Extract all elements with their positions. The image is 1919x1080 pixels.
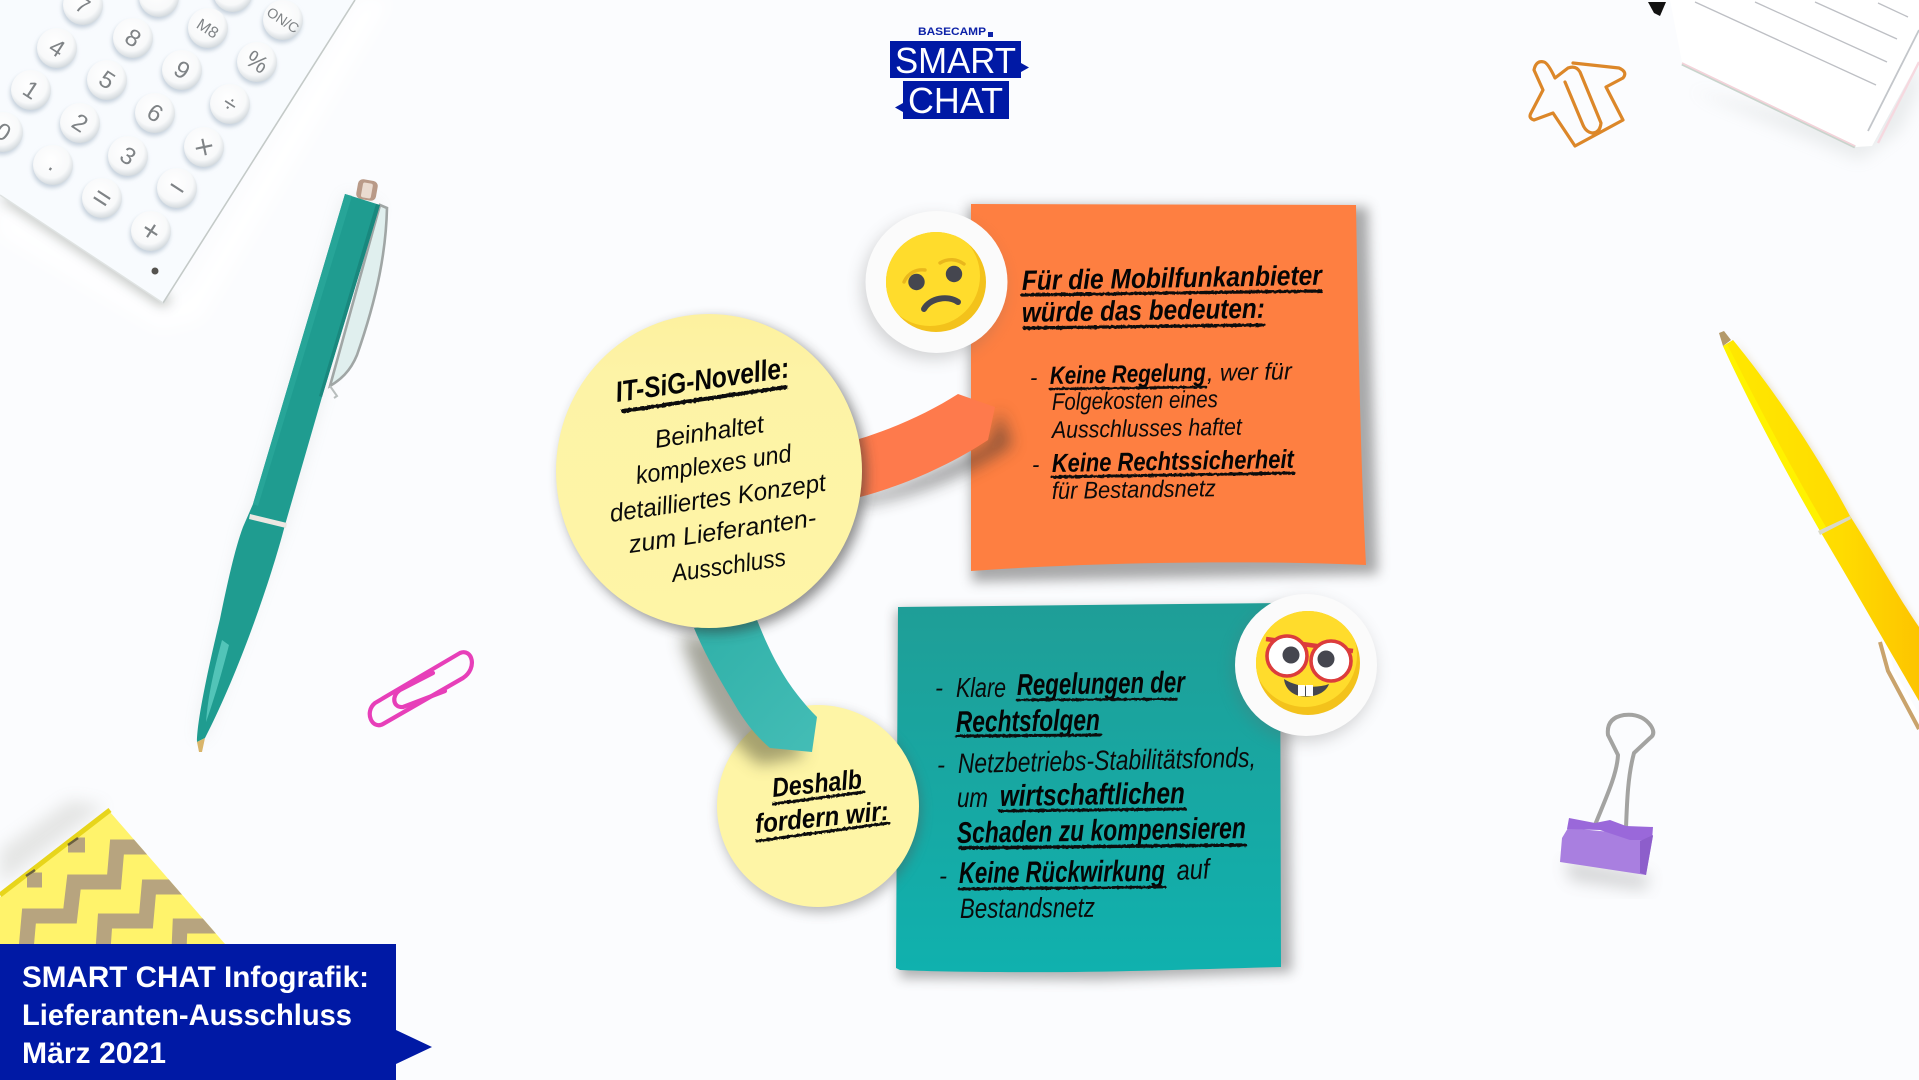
calculator: 1	[18, 75, 44, 105]
banner: footer title: März 2021	[22, 1037, 166, 1070]
orange house paper clip	[1530, 62, 1625, 146]
banner: footer title	[0, 944, 432, 1080]
glasses	[1266, 636, 1353, 681]
pen clip	[330, 205, 387, 398]
yellow pen clip	[1884, 642, 1919, 722]
yellow pen ring	[1818, 516, 1851, 535]
list item: Keine Rechtssicherheit	[1032, 444, 1295, 505]
list item: Regelungen: Regelungen der	[1017, 666, 1187, 702]
calculator: %	[240, 45, 273, 80]
panel: orange note	[968, 204, 1378, 582]
circle body text	[608, 410, 829, 588]
circle body text: zum Lieferanten-	[626, 504, 818, 559]
calculator: ÷	[217, 90, 243, 119]
list item: Keine Regelung: Folgekosten eines	[1052, 386, 1218, 416]
pen push button	[355, 178, 379, 202]
calculator: 6	[142, 98, 168, 128]
list item: Stabilitätsfonds: wirtschaftlichen	[1000, 777, 1185, 813]
small circle heading	[754, 764, 890, 841]
emoji: nerd face	[1233, 594, 1377, 742]
list item: Stabilitätsfonds: -	[937, 752, 945, 779]
calculator: 3	[115, 141, 141, 171]
small circle heading: Deshalb	[771, 764, 863, 803]
purple binder clip	[1560, 715, 1653, 890]
list item: Stabilitätsfonds	[937, 742, 1256, 850]
circle body text: komplexes und	[634, 439, 794, 490]
banner: footer title: Lieferanten-Ausschluss	[22, 999, 352, 1032]
logo: Basecamp Smart Chat	[890, 26, 1029, 121]
pen tip	[197, 738, 205, 752]
panel: teal note	[896, 603, 1292, 980]
calculator: M8	[193, 16, 221, 42]
calculator: +	[134, 213, 167, 250]
yellow pen	[1719, 331, 1919, 729]
panel: small yellow sticky circle	[717, 705, 921, 912]
small circle heading: fordern wir:	[754, 796, 890, 839]
calculator: .	[44, 151, 64, 177]
pen ring	[249, 514, 287, 528]
circle body text: detailliertes Konzept	[608, 469, 829, 528]
heading	[1022, 260, 1324, 328]
notepad	[1670, 0, 1919, 160]
list item: Rückwirkung: -	[939, 863, 947, 890]
list item: Keine Rechtssicherheit: für Bestandsnetz	[1052, 475, 1216, 505]
pink paper clip	[370, 652, 472, 725]
logo box Smart: SMART	[895, 40, 1016, 81]
heading: würde das bedeuten:	[1022, 293, 1265, 328]
calculator	[0, 0, 390, 330]
calculator: 9	[169, 55, 195, 85]
list item: Rückwirkung: Bestandsnetz	[960, 892, 1095, 924]
yellow pen tip	[1719, 331, 1731, 346]
panel: big yellow sticky circle	[556, 314, 867, 633]
list item: Keine Regelung	[1030, 358, 1293, 444]
list item: Keine Regelung: -	[1030, 365, 1037, 390]
calculator: ON/C	[264, 4, 302, 36]
calculator keys	[0, 0, 303, 251]
circle body text: Ausschluss	[668, 544, 788, 588]
list item: Regelungen	[935, 666, 1187, 739]
connector: teal arrow	[680, 620, 817, 765]
calculator: 4	[44, 33, 70, 63]
list item: Rückwirkung: auf	[1176, 853, 1213, 886]
calculator: 2	[67, 108, 93, 138]
black pen tip	[1648, 2, 1666, 16]
heading: Für die Mobilfunkanbieter	[1022, 260, 1324, 296]
yellow notebook	[0, 800, 225, 950]
list item: Rückwirkung: Keine Rückwirkung	[959, 855, 1165, 890]
circle heading: IT-SiG-Novelle:	[613, 352, 791, 409]
list item: Stabilitätsfonds: um	[957, 782, 988, 813]
calculator: ×	[187, 129, 220, 166]
emoji: worried face	[862, 211, 1008, 359]
calculator: =	[85, 180, 118, 217]
list item: Keine Regelung: Ausschlusses haftet	[1050, 414, 1243, 444]
calculator: 8	[120, 23, 146, 53]
mouth	[1284, 679, 1329, 697]
list item: Stabilitätsfonds: Schaden zu kompensieren	[957, 812, 1246, 850]
list item: Keine Regelung: , wer für	[1207, 358, 1293, 387]
list item: Regelungen: Rechtsfolgen	[956, 704, 1100, 739]
list item: Regelungen: Klare	[956, 672, 1006, 703]
logo box Chat: CHAT	[908, 80, 1003, 121]
teal pen	[197, 178, 387, 752]
connector: orange arrow	[859, 394, 1012, 505]
list item: Keine Regelung: Keine Regelung	[1050, 359, 1206, 390]
list item: Rückwirkung	[939, 853, 1213, 924]
list item: Stabilitätsfonds: Netzbetriebs-Stabilitätsfonds,	[957, 742, 1256, 779]
calculator: −	[160, 170, 193, 207]
logo wordmark Basecamp: BASECAMP	[918, 26, 986, 38]
calculator: 5	[94, 65, 120, 95]
list item: Keine Rechtssicherheit: Keine Rechtssicherheit	[1052, 444, 1295, 478]
list item: Regelungen: -	[935, 675, 943, 702]
circle body text: Beinhaltet	[653, 410, 767, 454]
banner: footer title: SMART CHAT Infografik:	[22, 961, 369, 994]
list item: Keine Rechtssicherheit: -	[1032, 452, 1039, 477]
